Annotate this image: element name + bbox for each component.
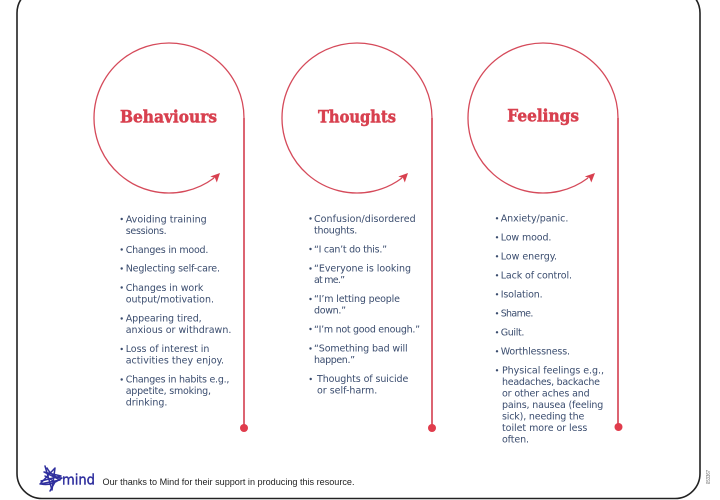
list: behaviours: activities they enjoy. — [126, 355, 224, 366]
stem line: feelings — [617, 118, 619, 427]
list: feelings: Low energy. — [501, 252, 557, 263]
footer thanks text: Our thanks to Mind for their support in producing this resource. — [102, 477, 354, 487]
list: feelings: Guilt. — [501, 328, 524, 339]
panel: behaviours — [94, 43, 248, 432]
list: behaviours: Changes in work — [126, 283, 204, 294]
list: feelings: or other aches and — [502, 389, 590, 400]
list: thoughts: “Something bad will — [314, 344, 408, 355]
list: thoughts: thoughts. — [314, 226, 357, 237]
list: behaviours: Changes in mood. — [126, 245, 208, 256]
list: thoughts: at me.” — [314, 275, 345, 286]
list: thoughts: Thoughts of suicide — [316, 374, 408, 385]
stem line: behaviours — [243, 118, 245, 428]
heading: behaviours: Behaviours — [120, 107, 217, 127]
end dot: behaviours — [240, 424, 248, 432]
list: feelings: toilet more or less — [502, 423, 587, 434]
list: feelings: Lack of control. — [501, 271, 572, 282]
end dot: feelings — [614, 423, 622, 431]
stem line: thoughts — [431, 118, 433, 428]
list: thoughts: or self-harm. — [317, 386, 377, 397]
heading: thoughts: Thoughts — [318, 107, 396, 127]
list: feelings: sick), needing the — [502, 412, 584, 423]
side reference code: 053367 — [706, 470, 712, 484]
list: thoughts: down.” — [314, 305, 346, 316]
list: behaviours: appetite, smoking, — [126, 386, 211, 397]
list: behaviours: output/motivation. — [126, 294, 214, 305]
heading: feelings: Feelings — [507, 107, 579, 127]
list: feelings: headaches, backache — [502, 377, 600, 388]
list: behaviours: Loss of interest in — [126, 344, 209, 355]
list: feelings: Isolation. — [501, 290, 543, 301]
icon: Mind scribble star — [40, 466, 62, 491]
spiral line: thoughts — [282, 43, 432, 193]
spiral line: behaviours — [94, 43, 244, 193]
list: behaviours: Neglecting self-care. — [126, 264, 220, 275]
list: thoughts: Confusion/disordered — [314, 214, 416, 225]
list: feelings: Worthlessness. — [501, 347, 570, 358]
list: thoughts: “I’m letting people — [314, 294, 400, 305]
list: feelings: Anxiety/panic. — [501, 214, 568, 225]
list: thoughts: “I’m not good enough.” — [314, 325, 420, 336]
wordmark: mind: mind — [62, 472, 95, 488]
list: feelings: pains, nausea (feeling — [502, 400, 603, 411]
list: behaviours: drinking. — [126, 397, 167, 408]
logo: Mind — [40, 466, 95, 491]
arrowhead: feelings — [585, 173, 595, 182]
end dot: thoughts — [428, 424, 436, 432]
list: behaviours: Changes in habits e.g., — [126, 375, 229, 386]
arrowhead: behaviours — [210, 173, 220, 182]
panel: thoughts — [282, 43, 436, 432]
list: thoughts — [309, 214, 420, 397]
list: feelings — [496, 214, 604, 446]
arrowhead: thoughts — [398, 173, 408, 182]
list: feelings: Shame. — [501, 309, 533, 320]
list: thoughts: happen.” — [314, 355, 355, 366]
spiral line: feelings — [468, 43, 618, 193]
list: feelings: Low mood. — [501, 233, 551, 244]
list: behaviours: Appearing tired, — [126, 314, 202, 325]
list: thoughts: “Everyone is looking — [314, 264, 411, 275]
list: behaviours: sessions. — [126, 226, 167, 237]
list: feelings: Physical feelings e.g., — [502, 366, 604, 377]
list: behaviours: anxious or withdrawn. — [126, 325, 231, 336]
list: thoughts: “I can’t do this.” — [314, 245, 387, 256]
list: feelings: often. — [502, 435, 529, 446]
list: behaviours — [120, 214, 231, 408]
panel: feelings — [468, 43, 622, 446]
list: behaviours: Avoiding training — [126, 214, 207, 225]
